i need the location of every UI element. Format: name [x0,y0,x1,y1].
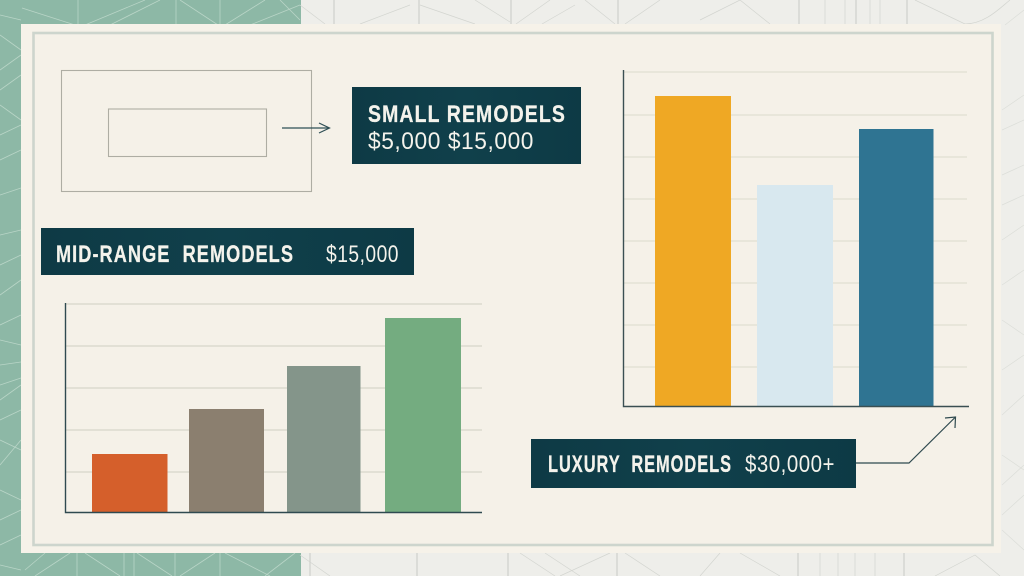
grey line pattern: right [1002,10,1024,550]
bar: luxury amber [655,96,731,406]
bar: mid-range taupe [189,409,264,512]
grey line pattern: top and bottom right [300,0,1010,576]
bar: mid-range green [385,318,461,512]
diagram: nested floor plan outline [62,70,312,192]
label: luxury remodels: LUXURY REMODELS [548,451,732,478]
arrow: plan to small remodels [282,123,330,133]
green patterned band: bottom [21,553,301,576]
label: small remodels [352,87,581,164]
bar chart: mid-range [65,303,482,512]
label: mid-range remodels: $15,000 [326,241,399,268]
label: mid-range remodels [41,228,414,275]
bar chart: luxury [623,70,969,406]
bar: mid-range orange [92,454,168,512]
green patterned band: top [0,0,301,25]
label: small remodels: SMALL REMODELS [368,101,566,128]
bar: luxury pale blue [757,185,833,406]
label: small remodels: $5,000 $15,000 [368,128,534,155]
green patterned band: left [0,0,21,576]
label: luxury remodels [531,439,856,488]
label: mid-range remodels: MID-RANGE REMODELS [56,241,294,268]
label: luxury remodels: $30,000+ [745,451,835,478]
bar: luxury teal [859,129,934,406]
arrow: luxury connector [856,417,956,463]
bar: mid-range grey-green [287,366,360,512]
